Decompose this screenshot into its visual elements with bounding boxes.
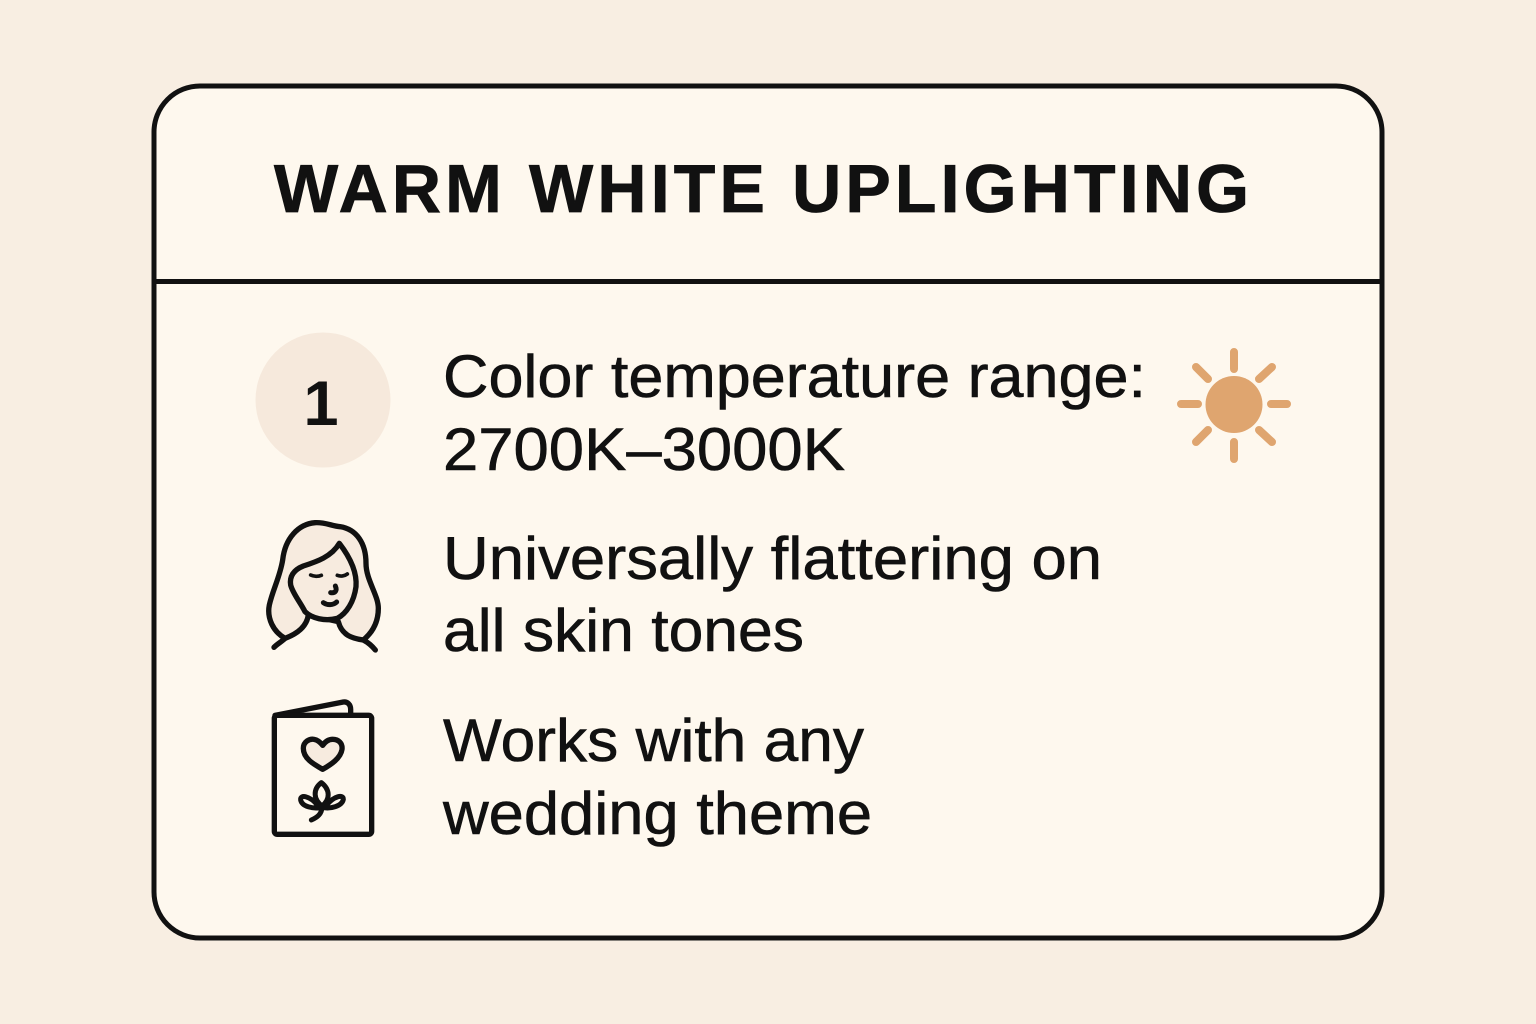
- text: skin tones: [443, 525, 1102, 664]
- text: skin tones: Universally flattering on: [443, 525, 1102, 592]
- card outline: [154, 86, 1382, 938]
- text: wedding theme: [442, 707, 872, 847]
- number badge: [256, 332, 390, 468]
- icon: woman's face: [269, 523, 378, 650]
- text: color temperature: 2700K–3000K: [443, 416, 845, 483]
- icon: wedding card: [274, 702, 372, 834]
- icon: sun: [1181, 352, 1287, 459]
- title: WARM WHITE UPLIGHTING: [274, 151, 1249, 227]
- text: color temperature: Color temperature range:: [443, 343, 1146, 410]
- text: color temperature: [443, 343, 1146, 483]
- panel: card: [154, 86, 1382, 938]
- text: skin tones: all skin tones: [443, 597, 804, 664]
- text: wedding theme: Works with any: [443, 707, 864, 774]
- number badge: 1: [303, 369, 339, 439]
- text: wedding theme: wedding theme: [442, 780, 872, 847]
